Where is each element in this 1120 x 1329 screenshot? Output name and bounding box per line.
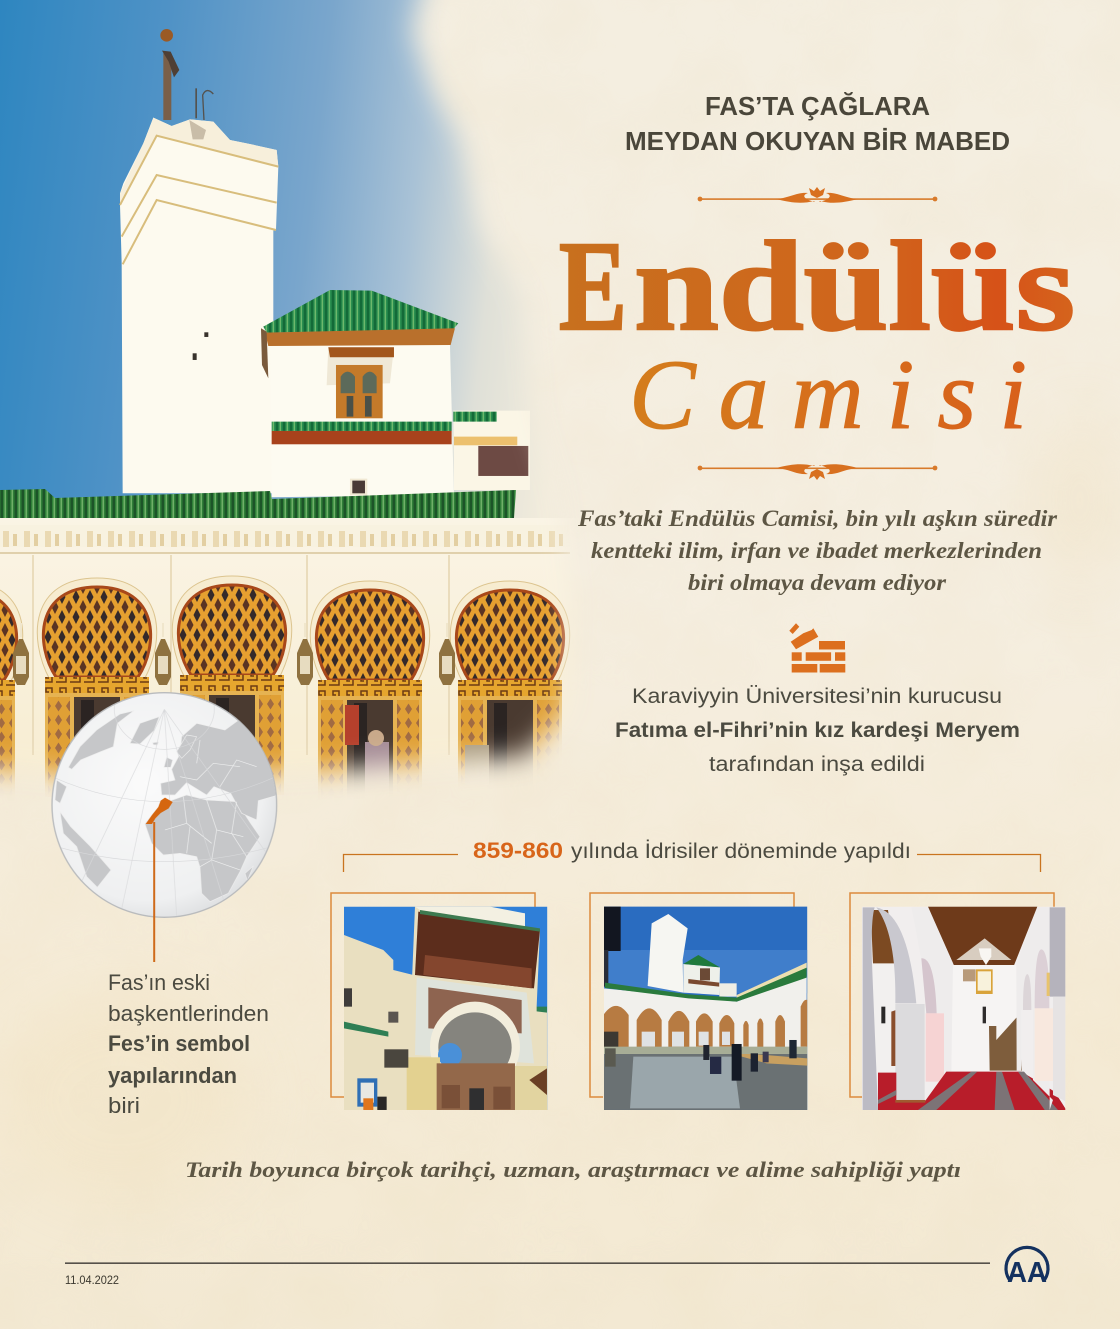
intro text: biri olmaya devam ediyor [688,570,947,595]
bracket with construction date: 859-860 [473,838,563,863]
arcade wall [0,518,570,794]
photo: mosque gate [344,907,547,1110]
founder text: tarafından inşa edildi [709,752,925,776]
headline: FAS’TA ÇAĞLARA [705,91,930,121]
closing statement: Tarih boyunca birçok tarihçi, uzman, araştırmacı ve alime sahipliği yaptı [185,1157,961,1182]
locator line [153,822,155,962]
carpet [878,1072,1066,1110]
minaret body [120,118,278,493]
title: Endülüs: E [559,215,627,357]
title: Camisi: Camisi [629,339,1027,450]
bracket with construction date: yılında İdrisiler döneminde yapıldı [571,840,911,863]
photo: prayer hall interior [862,907,1067,1111]
photo: mosque courtyard [603,906,807,1110]
Morocco highlight [146,798,173,824]
house with green tile roof [261,290,530,497]
caption: Fas'ın eski başkentlerinden: yapılarından [108,1063,237,1088]
founder text: Fatıma el-Fihri’nin kız kardeşi Meryem [615,718,1020,742]
right arcade [1016,1016,1053,1110]
intro text [577,506,1058,595]
intro text: Fas’taki Endülüs Camisi, bin yılı aşkın süredir [577,506,1058,531]
intro text: kentteki ilim, irfan ve ibadet merkezlerinden [591,538,1042,563]
logo: AA: AA [1007,1257,1047,1289]
left arcade [873,963,896,1073]
caption: Fas'ın eski başkentlerinden: başkentlerinden [108,1001,269,1026]
headline: MEYDAN OKUYAN BİR MABED [625,126,1010,156]
photo: Endülüs mosque minaret and courtyard [0,0,600,818]
headline [625,91,1010,156]
caption: Fas'ın eski başkentlerinden: biri [108,1093,140,1118]
caption: Fas'ın eski başkentlerinden: Fes’in sembol [108,1031,250,1056]
finial [160,29,213,120]
ornament: bottom divider [698,463,937,480]
sky [0,0,526,518]
globe locator [52,669,278,917]
tower group: minaret and roofed house [120,29,530,497]
founder text [615,684,1020,776]
caption: Fas'ın eski başkentlerinden [108,970,269,1118]
icon: trowel and brick wall [789,623,845,672]
photo frames [331,893,1054,1097]
caption: Fas'ın eski başkentlerinden: Fas’ın eski [108,970,210,995]
bracket with construction date [344,838,1040,872]
founder text: Karaviyyin Üniversitesi’nin kurucusu [632,684,1002,708]
green tile roof band [0,489,516,518]
footer rule [65,1262,990,1264]
land masses [55,711,278,902]
date: 11.04.2022 [65,1275,119,1287]
ornament: top divider [698,187,937,204]
title: Endülüs: ndülüs [634,215,1075,357]
